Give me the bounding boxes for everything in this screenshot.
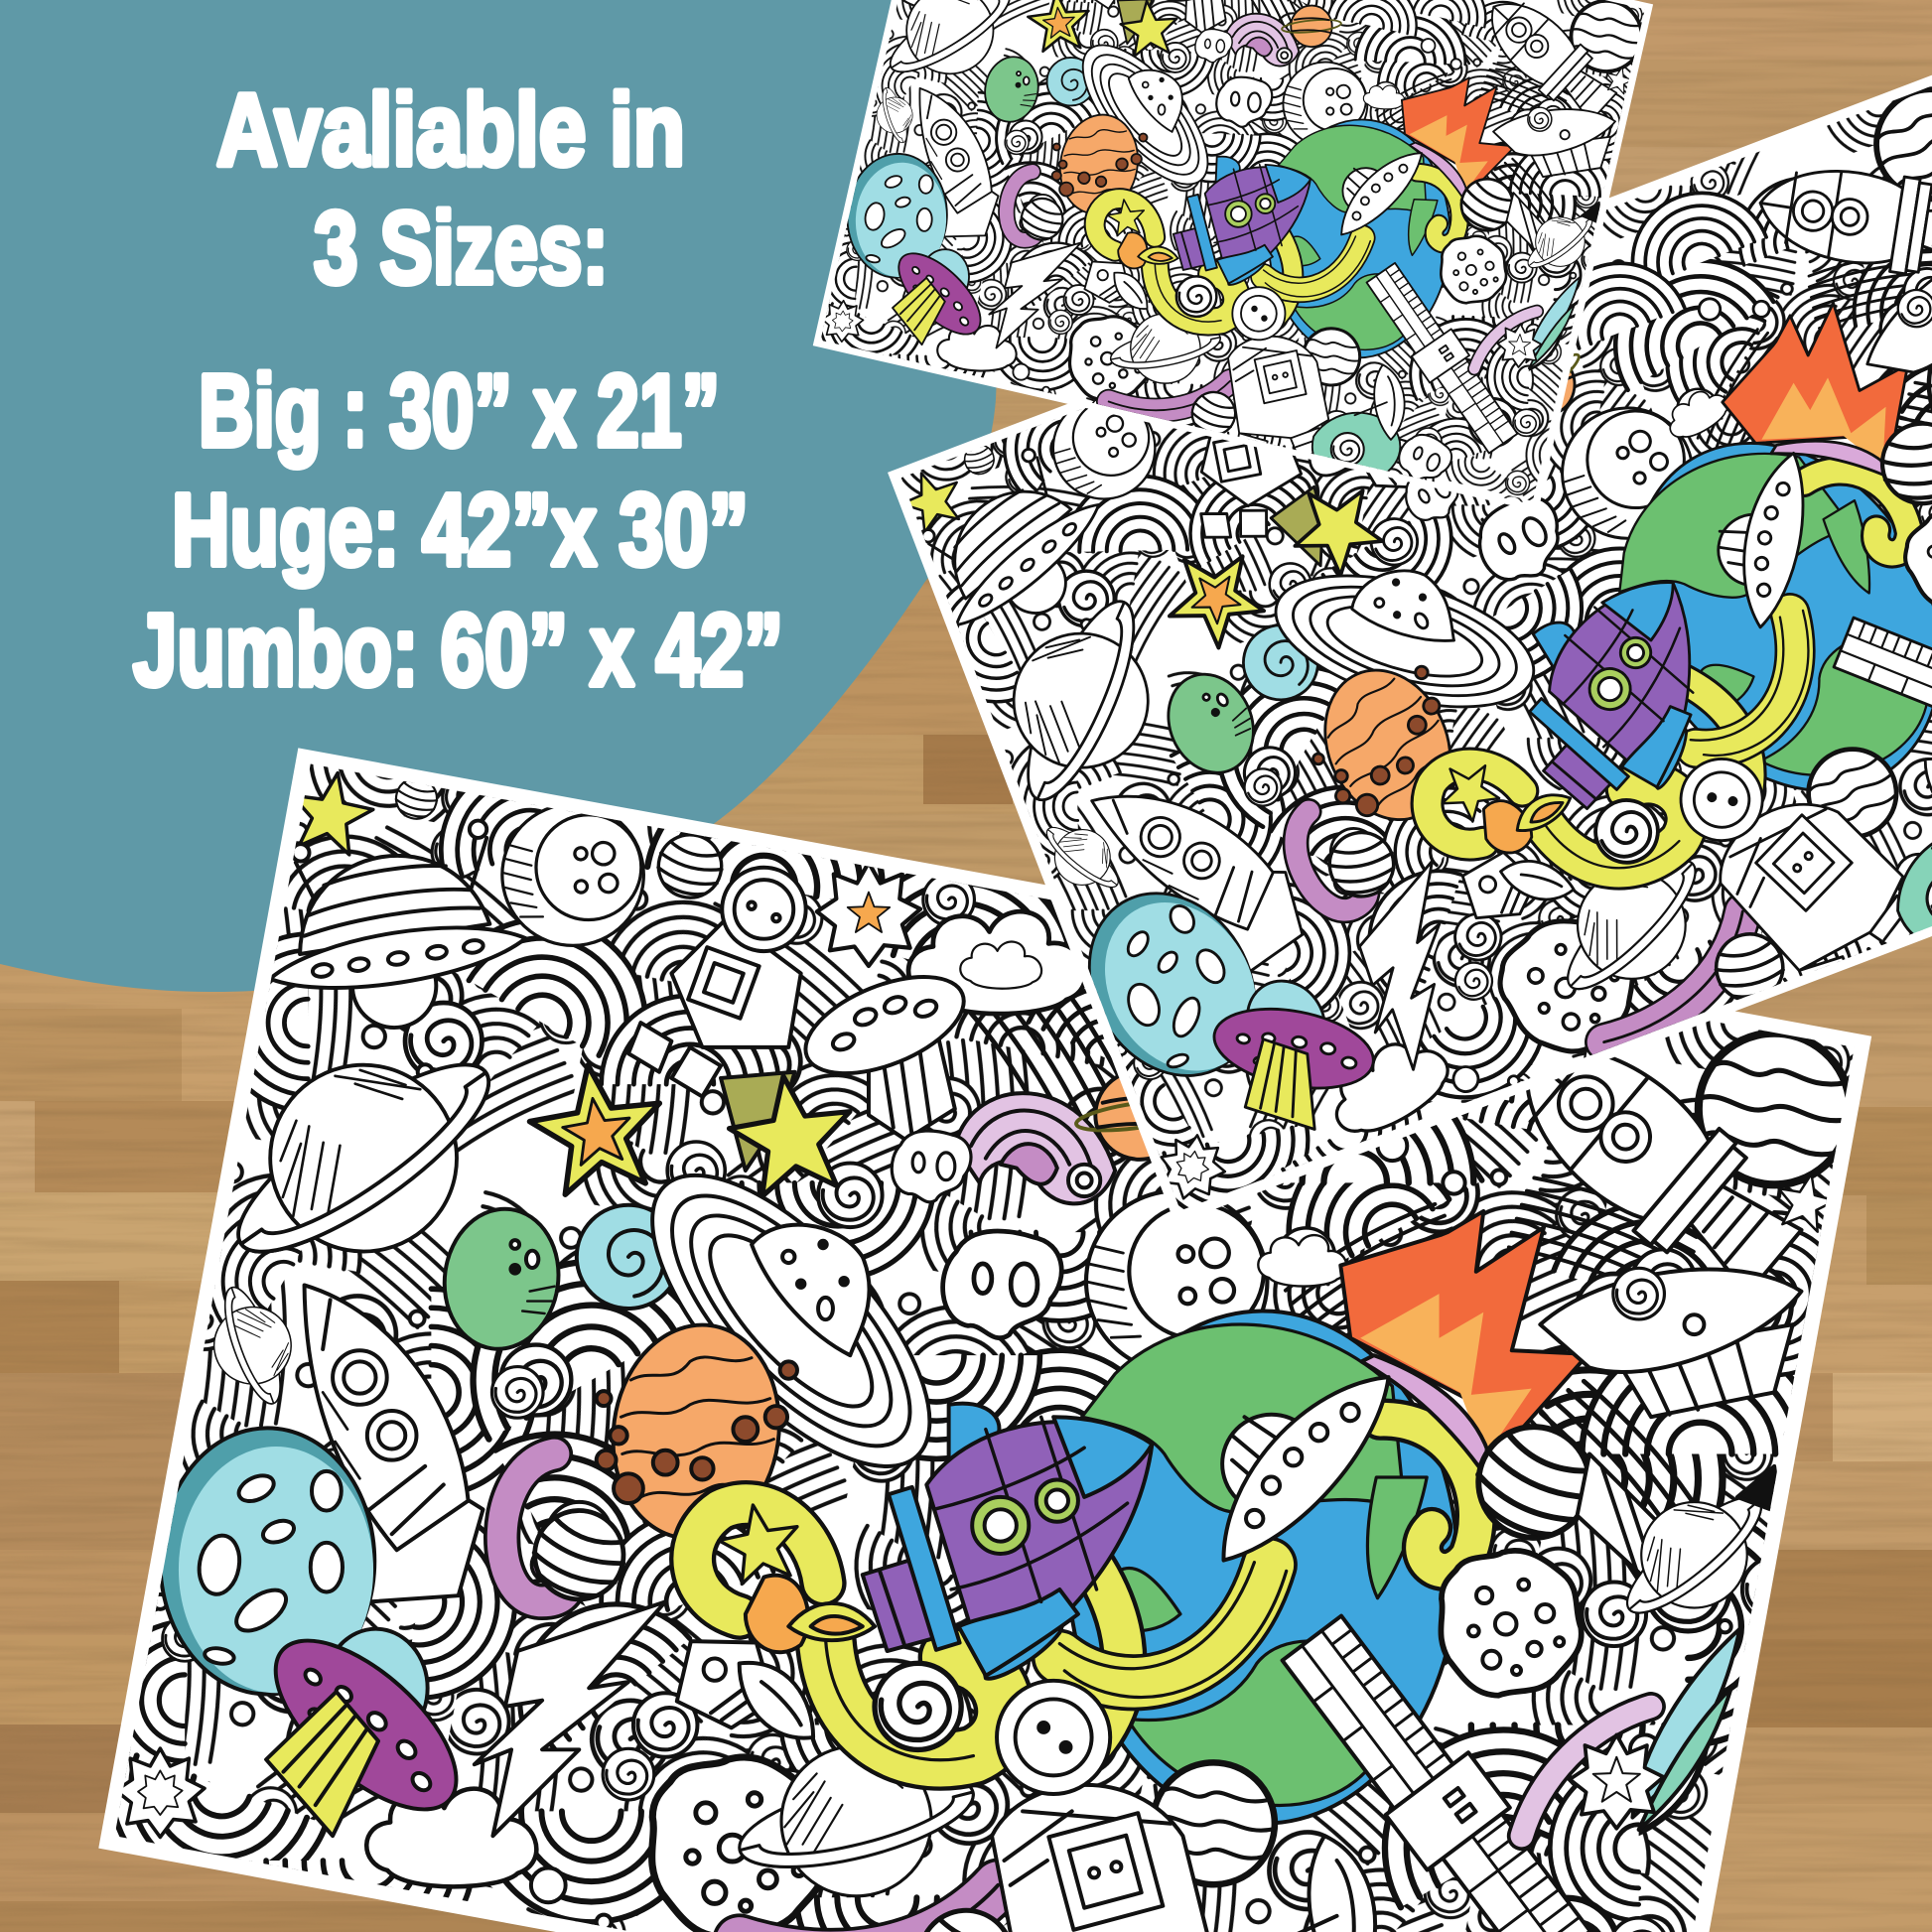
icon: leaf shape <box>740 1663 813 1738</box>
icon: striped planet top <box>656 833 724 899</box>
text block: size list: Huge: 42”x 30” <box>172 473 749 587</box>
icon: teal cratered planet <box>160 1428 374 1694</box>
icon: space shuttle <box>1578 1453 1676 1589</box>
icon: lightning bolt <box>475 1601 665 1836</box>
icon: olive gem and star <box>721 1068 860 1199</box>
text block: size list <box>133 353 783 707</box>
icon: wavy planet under astronaut <box>1148 1757 1280 1889</box>
icon: small saturn <box>196 1275 310 1417</box>
icon: saucer on earth <box>1192 1348 1412 1582</box>
poster: small top coloring poster <box>798 0 1659 515</box>
icon: yellow ribbons <box>693 1420 1476 1774</box>
icon: burst star with orange centre <box>817 863 920 966</box>
icon: white saturn bottom <box>722 1720 991 1923</box>
icon: star right edge <box>1771 1168 1840 1234</box>
icon: ringed planet with craters <box>608 1132 975 1510</box>
icon: eye saucer right <box>1540 1268 1801 1417</box>
icon: ringed shape right <box>1595 1460 1793 1650</box>
heading: available in 3 sizes: Avaliable in <box>216 72 685 187</box>
icon: orange ringed planet (cut by poster) <box>1074 1070 1205 1160</box>
icon: striped planet by flame <box>1460 1409 1607 1556</box>
icon: top moon <box>491 793 655 957</box>
icon: green planet <box>436 1201 567 1356</box>
icon: striped planet centre <box>522 1498 636 1611</box>
icon: pink rainbow bottom right <box>1522 1707 1651 1836</box>
icon: purple swirl ribbon <box>502 1453 568 1601</box>
icon: big ringed planet <box>188 996 539 1320</box>
icon: small rock blob <box>892 1131 971 1202</box>
icon: pink planet arc <box>1361 1355 1491 1466</box>
icon: white rocket top right <box>1486 1005 1818 1313</box>
icon: small striped planet <box>391 773 442 823</box>
icon: big moon <box>1074 1179 1279 1384</box>
icon: orange planet with brown moons <box>597 1314 797 1550</box>
icon: cratered rock moon <box>652 1757 826 1932</box>
icon: yellow star with orange centre <box>523 1056 670 1198</box>
icon: yellow star top left <box>284 765 378 858</box>
icon: white rocket <box>305 1285 483 1601</box>
icon: satellite dish <box>1269 1836 1375 1932</box>
icon: cyan swirl <box>577 1205 680 1309</box>
icon: white saucer with beam <box>792 957 977 1140</box>
text block: size list: Big : 30” x 21” <box>199 353 720 468</box>
text block: size list: Jumbo: 60” x 42” <box>133 593 783 707</box>
icon: small white rocket <box>653 1609 792 1748</box>
icon: star on yellow swirl <box>714 1498 875 1652</box>
icon: burst star right <box>1570 1734 1663 1829</box>
icon: cratered moon right <box>1441 1551 1582 1696</box>
poster: middle coloring poster <box>749 0 1932 1409</box>
icon: bottom cloud <box>366 1789 536 1886</box>
icon: triangle tip right <box>1737 1466 1780 1513</box>
icon: striped planet bottom <box>907 1898 1025 1932</box>
icon: cloud top right <box>908 911 1086 1014</box>
icon: spiral in ribbon <box>875 1663 961 1749</box>
icon: striped purple ribbon <box>740 1885 998 1932</box>
heading: available in 3 sizes: 3 Sizes: <box>314 191 609 305</box>
icon: pink rainbow <box>955 1093 1115 1203</box>
icon: earth with continents <box>1068 1311 1457 1824</box>
icon: astronaut bottom <box>992 1681 1220 1932</box>
icon: flame <box>1340 1211 1588 1465</box>
icon: cloud by moon <box>1258 1235 1347 1287</box>
icon: satellite <box>1283 1616 1620 1932</box>
icon: rock blob <box>943 1231 1061 1338</box>
icon: purple mushroom saucer <box>248 1611 483 1839</box>
heading: available in 3 sizes <box>216 72 685 305</box>
icon: flying saucer top left <box>254 821 529 1028</box>
teal blob panel <box>0 0 997 992</box>
poster: big front coloring poster <box>79 737 1871 1932</box>
icon: wavy planet top right <box>1689 1024 1860 1194</box>
icon: astronaut top <box>628 868 806 1097</box>
icon: purple rocket <box>863 1404 1152 1679</box>
icon: comet teal <box>1632 1629 1739 1830</box>
icon: small burst star bottom left <box>116 1748 205 1837</box>
